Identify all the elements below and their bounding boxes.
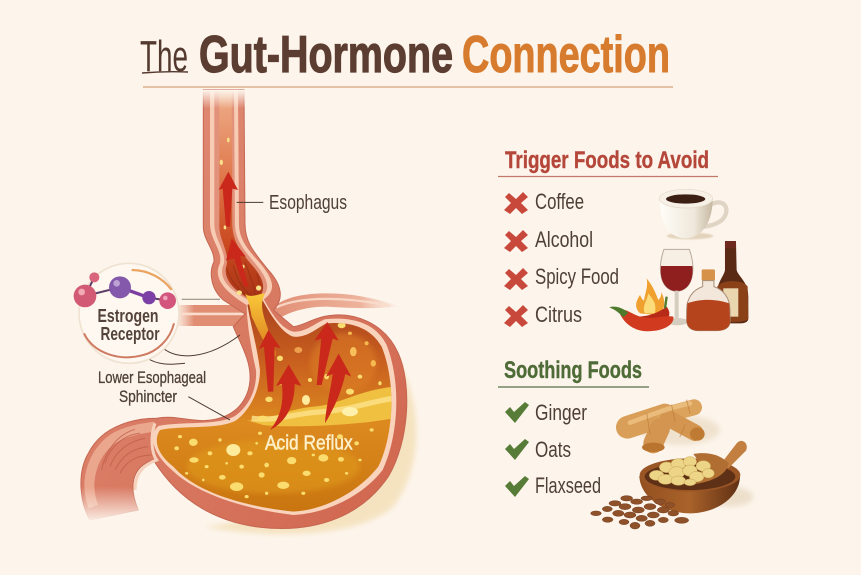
icon: whiskey bottle	[717, 241, 748, 323]
soothing food list: Ginger	[535, 400, 587, 425]
duodenum highlight and folds	[77, 423, 157, 523]
lumen with acid	[156, 300, 392, 512]
stomach outer wall	[81, 90, 407, 529]
label: Lower Esophageal Sphincter: Sphincter	[119, 388, 177, 406]
icon: ginger root	[627, 400, 720, 452]
diaphragm band	[177, 293, 400, 326]
reflux arrows	[219, 172, 351, 430]
soothing food list	[505, 400, 601, 498]
label: Esophagus: Esophagus	[269, 192, 347, 214]
icon: wooden bowl with oats	[639, 441, 753, 513]
trigger food illustrations	[609, 189, 748, 331]
label: Acid Reflux: Acid Reflux	[265, 431, 353, 454]
top fade	[200, 90, 250, 108]
icon: check	[505, 476, 529, 497]
title: Gut-Hormone	[199, 26, 453, 84]
acid bubbles	[174, 322, 382, 498]
estrogen receptor badge	[74, 263, 179, 363]
trigger food list: Alcohol	[535, 227, 593, 252]
leader lines	[147, 202, 263, 420]
icon: cross	[504, 305, 528, 327]
label: Lower Esophageal Sphincter	[98, 369, 206, 406]
trigger food list: Spicy Food	[535, 264, 619, 289]
label: Lower Esophageal Sphincter: Lower Esophageal	[98, 369, 206, 387]
title: The	[140, 32, 188, 81]
icon: flaxseeds	[591, 496, 689, 529]
icon: coffee cup	[659, 189, 726, 239]
acid surface band	[240, 387, 393, 426]
title	[140, 26, 670, 84]
label: Estrogen Receptor	[98, 306, 160, 344]
stomach and esophagus diagram	[74, 90, 416, 534]
icon: cross	[504, 268, 528, 290]
icon: wine glass	[660, 249, 693, 325]
trigger food list	[504, 189, 619, 327]
icon: check	[505, 439, 529, 460]
heading: Soothing Foods: Soothing Foods	[504, 357, 642, 384]
soothing food list: Oats	[535, 437, 571, 462]
heading: Trigger Foods to Avoid: Trigger Foods to Avoid	[505, 147, 709, 174]
icon: cross	[504, 192, 528, 214]
pale inner lining	[153, 298, 396, 515]
soothing food list: Flaxseed	[535, 473, 601, 498]
icon: chili and flame	[609, 278, 673, 331]
icon: check	[505, 402, 529, 423]
trigger food list: Coffee	[535, 189, 584, 214]
sphincter neck	[245, 293, 276, 357]
stomach shadow	[203, 343, 416, 534]
title: Connection	[462, 26, 670, 84]
trigger food list: Citrus	[535, 302, 582, 327]
soothing food illustrations	[591, 400, 753, 529]
label: Estrogen Receptor: Estrogen	[98, 306, 158, 326]
label: Estrogen Receptor: Receptor	[100, 324, 160, 344]
esophagus lining and channel	[210, 90, 272, 305]
icon: cross	[504, 230, 528, 252]
icon: amber flask	[687, 269, 730, 331]
